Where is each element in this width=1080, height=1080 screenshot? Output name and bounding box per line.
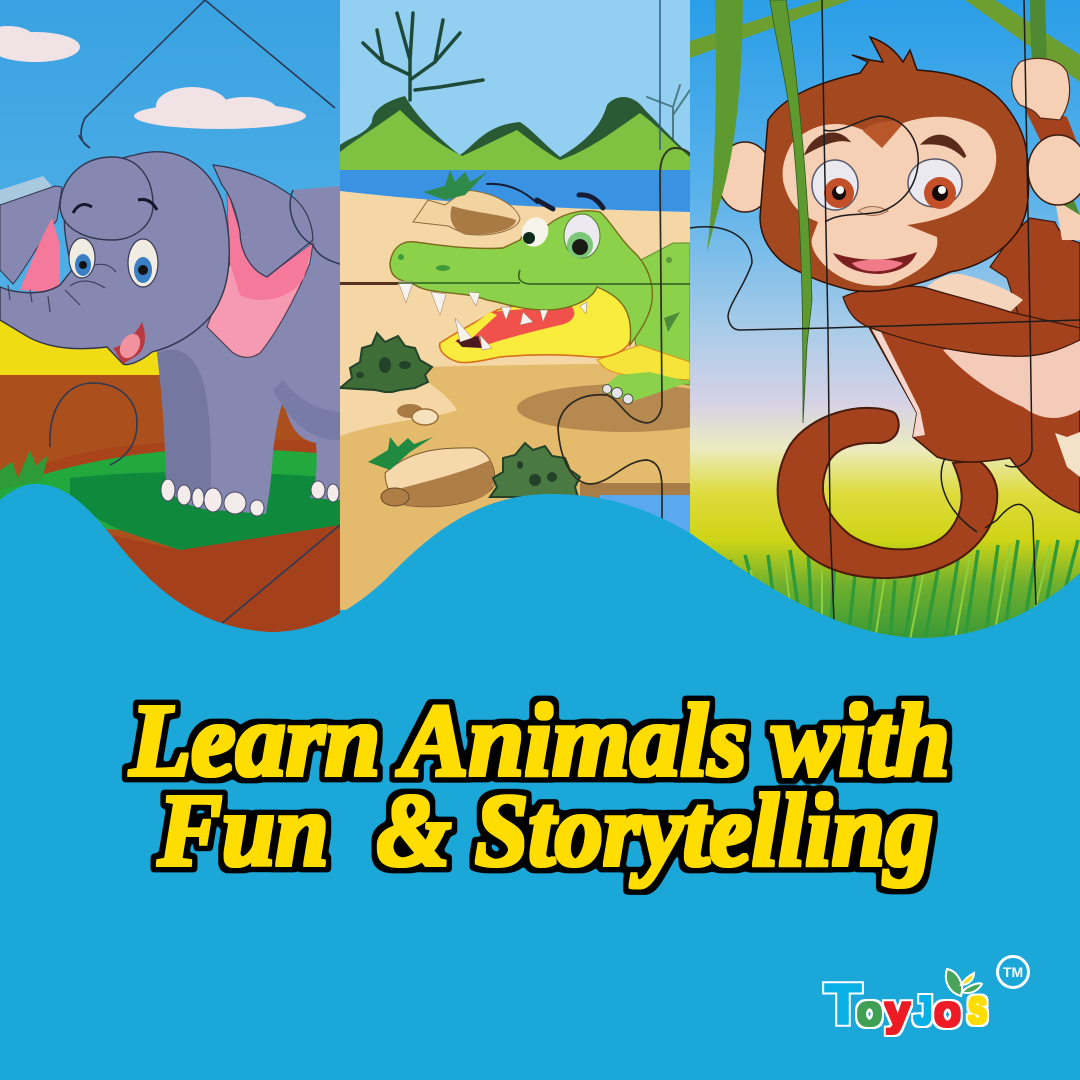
logo letter y: y (885, 987, 911, 1034)
monkey forearm and hand (1012, 58, 1080, 240)
title line 2: Fun & Storytelling (157, 773, 933, 888)
crocodile teeth (398, 281, 587, 350)
hills (340, 96, 690, 160)
clouds (0, 26, 306, 129)
sand (340, 191, 690, 436)
logo letter o: o (857, 987, 882, 1034)
elephant left ear (0, 176, 52, 204)
elephant right ear (207, 190, 313, 357)
puzzle lines (340, 0, 690, 520)
crocodile lower jaw (440, 287, 634, 363)
crocodile eyes (522, 217, 548, 247)
logo: Toyjos (825, 972, 987, 1036)
bushes (340, 333, 432, 392)
title line 1: Learn Animals with (129, 683, 950, 798)
panel: crocodile puzzle (340, 0, 690, 610)
logo letter j: J (914, 989, 932, 1033)
logo letter T: T (825, 972, 861, 1035)
pebbles (397, 404, 423, 418)
logo letter s: s (968, 981, 987, 1034)
crocodile body (634, 243, 690, 385)
title (129, 683, 950, 888)
leaves in front (707, 0, 812, 423)
elephant toes (161, 479, 339, 516)
crocodile brows (487, 184, 603, 209)
logo letter o second: o (934, 987, 961, 1036)
elephant puzzle circle (290, 190, 340, 264)
wave: blue background (0, 484, 1080, 1080)
monkey back arm (990, 218, 1080, 330)
rock and grass lower (368, 437, 495, 507)
monkey chest patch (927, 274, 1023, 312)
puzzle lines (690, 0, 1080, 620)
panel: elephant puzzle (0, 0, 340, 655)
logo leaves (946, 969, 982, 996)
monkey ears (717, 142, 773, 212)
grass near water (423, 170, 487, 200)
grass blades (730, 540, 1078, 640)
monkey brows (807, 134, 847, 152)
monkey face (783, 117, 996, 286)
elephant eyes (69, 238, 95, 278)
monkey forehead shading (863, 121, 903, 148)
elephant head and trunk (0, 152, 229, 364)
elephant body (157, 262, 340, 514)
monkey eyes (812, 160, 858, 210)
elephant mouth (113, 322, 145, 364)
monkey nose and mouth (858, 206, 888, 216)
panel: monkey puzzle (690, 0, 1080, 650)
monkey head (760, 37, 1029, 291)
branches (690, 0, 1080, 215)
ground bands (0, 320, 160, 375)
monkey front arm (843, 286, 1080, 356)
puzzle cut lines (50, 0, 340, 625)
grass tuft (0, 450, 48, 490)
crocodile head (390, 211, 652, 345)
trademark badge (998, 956, 1028, 988)
elephant forehead bump (60, 157, 153, 240)
water (340, 170, 690, 215)
trademark badge: TM (1003, 964, 1023, 980)
shadow patches (517, 384, 690, 432)
monkey tail (778, 408, 997, 578)
elephant hind piece (293, 186, 340, 265)
rock near water (413, 170, 520, 235)
trees (363, 13, 690, 140)
elephant brows and trunk folds (8, 199, 157, 312)
monkey torso (865, 300, 1080, 513)
